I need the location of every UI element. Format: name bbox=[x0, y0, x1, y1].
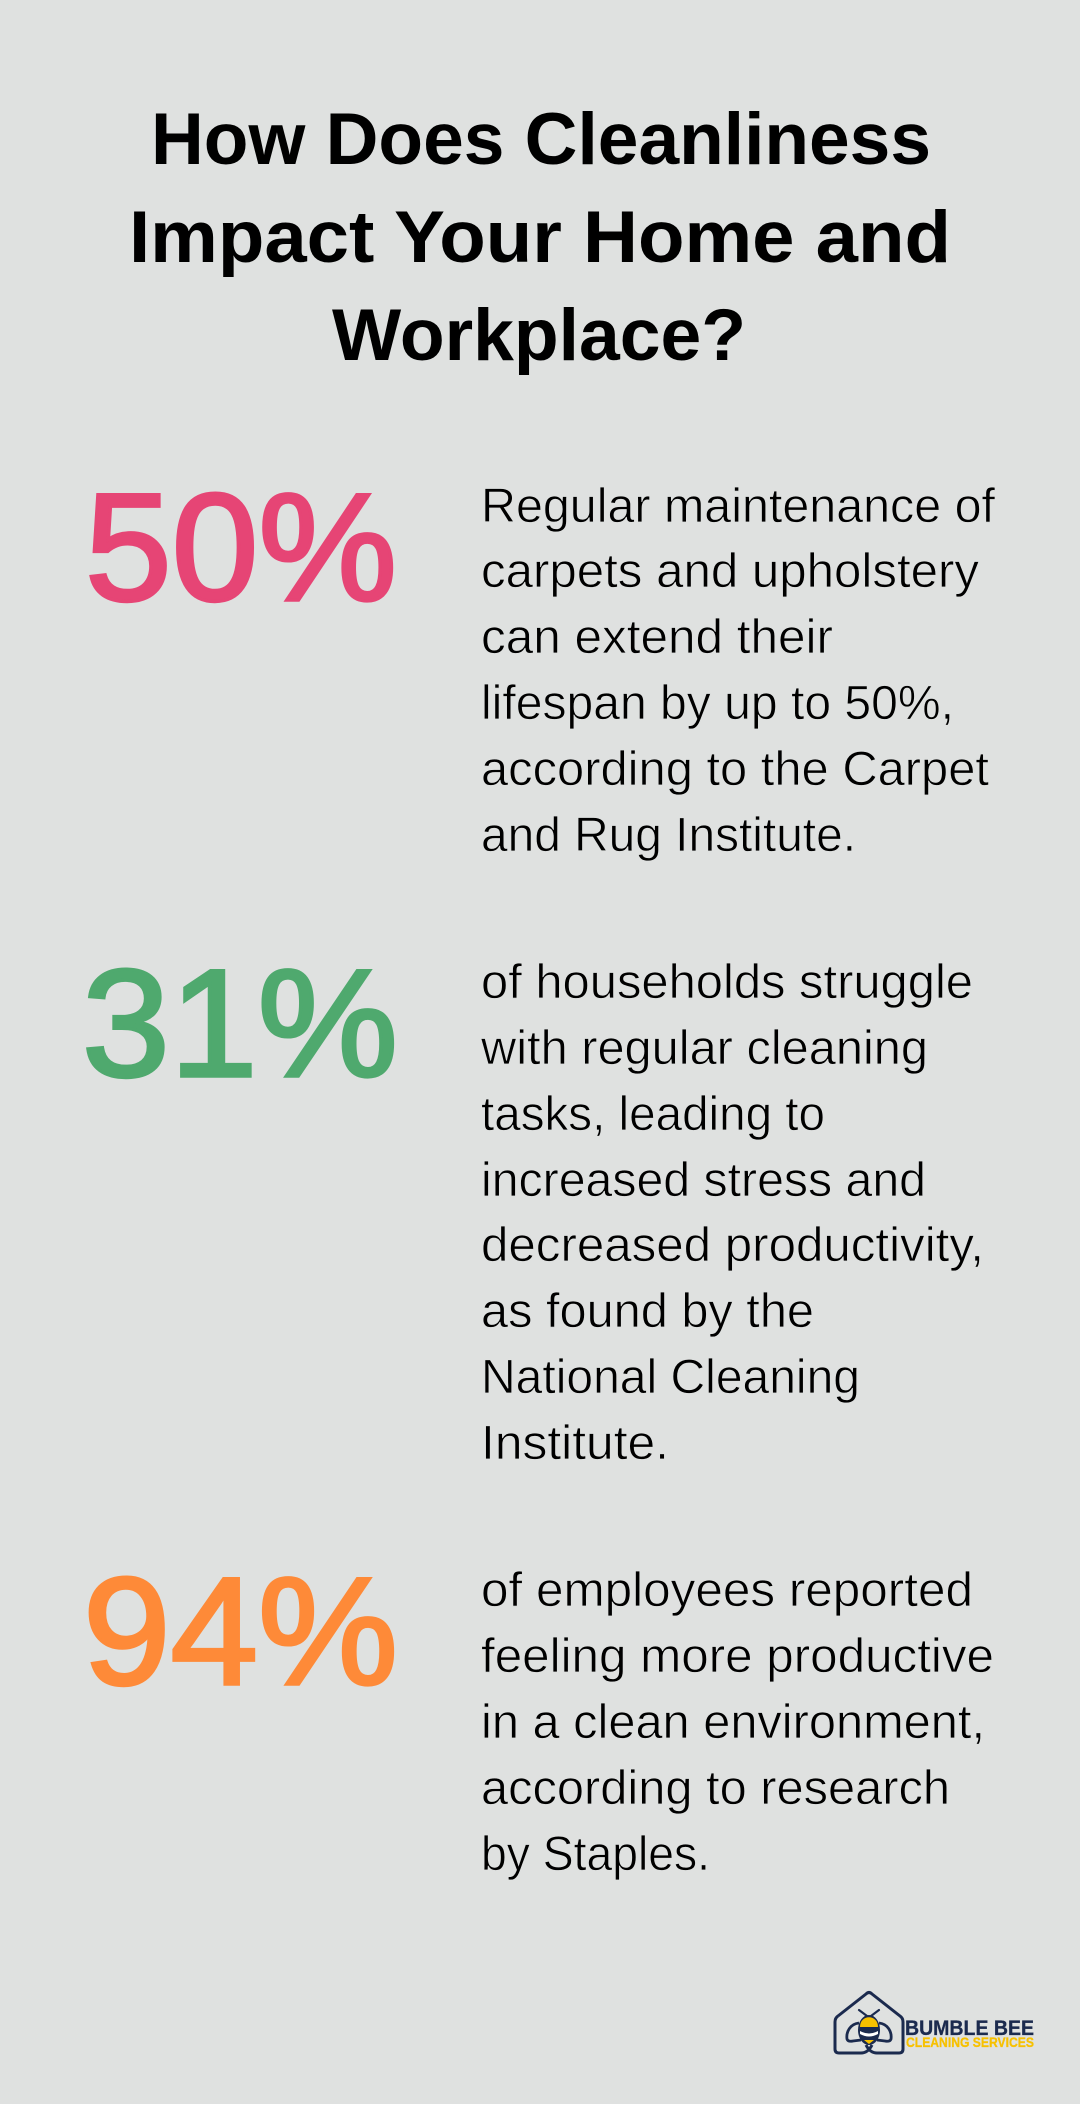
text block: employees: in a clean environment, bbox=[481, 1696, 985, 1749]
text block: employees: according to research bbox=[481, 1762, 950, 1815]
text block: employees: of employees reported bbox=[481, 1564, 973, 1617]
text block: carpets and upholstery: lifespan by up to 50%, bbox=[481, 677, 954, 730]
number: 50%: 50% bbox=[85, 462, 397, 633]
number: 31%: 31% bbox=[82, 938, 398, 1109]
text block: households: tasks, leading to bbox=[481, 1088, 825, 1141]
title: Impact Your Home and bbox=[129, 197, 951, 278]
text block: carpets and upholstery: Regular maintenance of bbox=[481, 480, 996, 533]
text block: employees bbox=[481, 1564, 994, 1881]
panel: 94% statistic bbox=[83, 1546, 994, 1881]
text block: carpets and upholstery: and Rug Institute. bbox=[481, 809, 856, 862]
title bbox=[129, 99, 951, 376]
icon: house with bee bbox=[835, 1992, 903, 2053]
panel: 50% statistic bbox=[85, 462, 996, 862]
text block: employees: by Staples. bbox=[481, 1828, 710, 1881]
text block: carpets and upholstery bbox=[481, 480, 996, 862]
text block: households: as found by the bbox=[481, 1285, 814, 1338]
logo: Bumble Bee Cleaning Services bbox=[835, 1992, 1034, 2053]
title: Workplace? bbox=[332, 295, 746, 376]
wordmark: BUMBLE BEE bbox=[905, 2017, 1034, 2040]
text block: households: increased stress and bbox=[481, 1154, 926, 1207]
text block: carpets and upholstery: carpets and upholstery bbox=[481, 545, 979, 598]
text block: households: National Cleaning bbox=[481, 1351, 860, 1404]
title: How Does Cleanliness bbox=[151, 99, 931, 180]
panel: 31% statistic bbox=[82, 938, 984, 1470]
text block: carpets and upholstery: according to the Carpet bbox=[481, 743, 989, 796]
text block: households: with regular cleaning bbox=[480, 1022, 928, 1075]
text block: carpets and upholstery: can extend their bbox=[481, 611, 833, 664]
text block: households: of households struggle bbox=[481, 956, 973, 1009]
tagline: CLEANING SERVICES bbox=[906, 2035, 1034, 2050]
text block: households: Institute. bbox=[481, 1417, 669, 1470]
text block: employees: feeling more productive bbox=[481, 1630, 994, 1683]
text block: households: decreased productivity, bbox=[481, 1219, 984, 1272]
text block: households bbox=[480, 956, 984, 1470]
number: 94%: 94% bbox=[83, 1546, 398, 1717]
